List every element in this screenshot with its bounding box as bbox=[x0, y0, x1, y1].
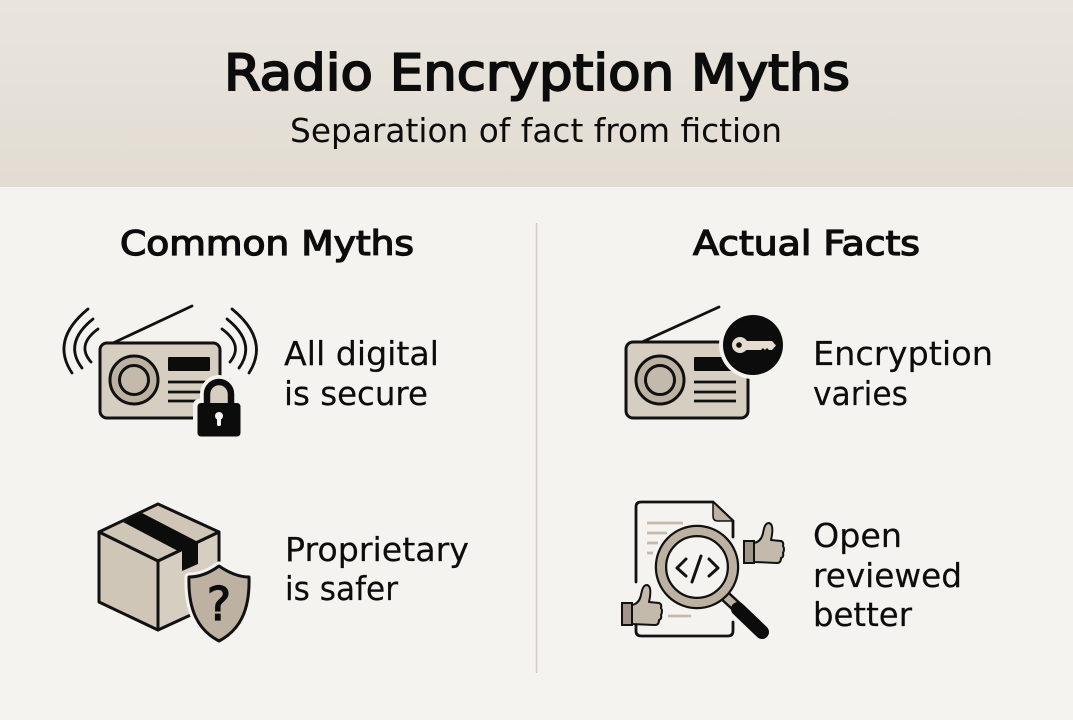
code symbol bbox=[677, 556, 718, 582]
heading: common myths: Common Myths bbox=[120, 224, 414, 264]
icon: key badge bbox=[719, 311, 787, 379]
document bbox=[636, 502, 733, 636]
text: encryption varies bbox=[813, 334, 993, 413]
text: all digital is secure: is secure bbox=[284, 374, 428, 413]
magnifier bbox=[661, 531, 762, 632]
text: all digital is secure bbox=[284, 334, 439, 413]
text: open reviewed better: reviewed bbox=[813, 556, 962, 595]
text: proprietary is safer bbox=[285, 530, 469, 608]
icon: radio with signal waves and padlock bbox=[64, 306, 256, 441]
panel: actual facts bbox=[622, 224, 993, 636]
panel: common myths bbox=[64, 224, 469, 641]
text: all digital is secure: All digital bbox=[284, 334, 439, 373]
text: open reviewed better: Open bbox=[813, 516, 902, 555]
icon: box with question shield bbox=[99, 504, 249, 641]
text: open reviewed better bbox=[813, 516, 962, 634]
text: encryption varies: varies bbox=[813, 374, 908, 413]
header band bbox=[0, 0, 1073, 187]
text: proprietary is safer: is safer bbox=[285, 569, 398, 608]
icon: thumbs up right bbox=[744, 523, 784, 563]
icon: radio with key badge bbox=[626, 307, 787, 418]
text: encryption varies: Encryption bbox=[813, 334, 993, 373]
text: proprietary is safer: Proprietary bbox=[285, 530, 469, 569]
icon: question shield bbox=[189, 566, 249, 641]
title: Radio Encryption Myths bbox=[224, 44, 850, 102]
heading: actual facts: Actual Facts bbox=[693, 224, 920, 264]
text: open reviewed better: better bbox=[813, 595, 912, 634]
tape bbox=[123, 513, 198, 571]
subtitle: Separation of fact from fiction bbox=[290, 111, 782, 150]
icon: document with magnifier and thumbs up bbox=[622, 502, 784, 636]
icon: question shield: ? bbox=[207, 577, 231, 631]
icon: thumbs up left bbox=[622, 585, 662, 625]
icon: padlock bbox=[193, 379, 245, 441]
